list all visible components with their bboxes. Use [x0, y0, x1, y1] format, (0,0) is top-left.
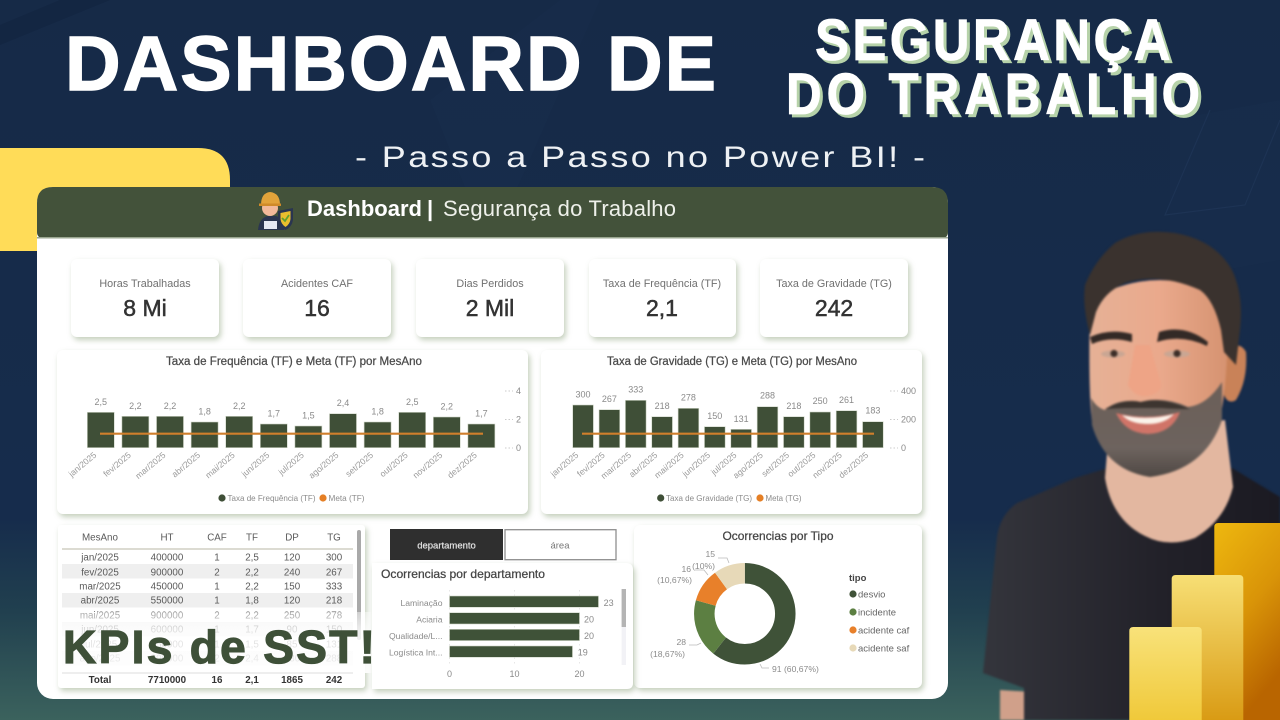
target line — [100, 433, 483, 435]
table rows: 2,5 — [245, 552, 259, 564]
table total row: Total — [89, 675, 112, 686]
table rows: 1,5 — [245, 640, 259, 650]
value labels: 1,7 — [475, 408, 488, 418]
month axis: mai/2025 — [652, 450, 686, 480]
department labels: Qualidade/L... — [389, 631, 442, 641]
table rows: 2 — [214, 568, 220, 578]
table header: TF — [246, 532, 258, 544]
dashboard header — [37, 187, 948, 238]
table scrollbar — [357, 530, 361, 640]
value labels: 218 — [786, 401, 801, 411]
value axis — [505, 386, 521, 453]
table total row — [60, 672, 360, 686]
icon: safety worker — [258, 192, 293, 230]
header title: | — [427, 196, 433, 221]
table rows: 800000 — [151, 654, 184, 664]
title: segurança do trabalho — [786, 8, 1200, 127]
table total row: 7710000 — [148, 675, 187, 686]
table rows: 1 — [214, 582, 220, 592]
table rows: 120 — [284, 596, 301, 606]
value axis: 0 — [901, 443, 906, 453]
month axis: dez/2025 — [445, 450, 479, 480]
value labels: 218 — [655, 401, 670, 411]
eyes — [1101, 350, 1190, 358]
month axis: dez/2025 — [837, 450, 870, 480]
table header: TG — [327, 532, 341, 544]
table header — [62, 532, 353, 550]
month axis: jun/2025 — [680, 450, 712, 479]
target line — [582, 433, 874, 435]
teeth — [1122, 414, 1174, 424]
subtitle: - Passo a Passo no Power BI! - — [355, 141, 925, 174]
department values — [578, 598, 614, 658]
chart title: Taxa de Gravidade (TG) e Meta (TG) por MesAno — [607, 356, 857, 368]
department labels: Logística Int... — [389, 648, 442, 658]
value labels: 1,5 — [302, 410, 315, 420]
table rows: 333 — [326, 582, 343, 592]
department labels: Laminação — [400, 598, 443, 608]
table rows: 120 — [284, 552, 301, 564]
table rows: 2,2 — [245, 568, 259, 578]
face — [1089, 280, 1229, 477]
table rows: 250 — [284, 610, 301, 622]
value axis: 200 — [901, 414, 916, 424]
month axis: abr/2025 — [627, 450, 660, 479]
table rows: mar/2025 — [79, 582, 121, 592]
donut title: Ocorrencias por Tipo — [722, 529, 834, 543]
table rows: 2,4 — [245, 654, 259, 664]
month axis: out/2025 — [785, 450, 818, 479]
month axis: mar/2025 — [599, 450, 633, 481]
callout: kpis de sst: KPIs de SST! — [63, 621, 375, 673]
table rows: 150 — [326, 624, 343, 636]
panel: kpi horas trabalhadas: 8 Mi — [123, 295, 167, 321]
value labels: 267 — [602, 394, 617, 404]
table rows: jun/2025 — [80, 624, 119, 636]
legend: Taxa de Gravidade (TG) — [666, 493, 752, 503]
donut legend: acidente caf — [858, 626, 910, 636]
nose — [1128, 345, 1161, 396]
presenter portrait — [983, 232, 1280, 720]
panel: kpi dias perdidos: 2 Mil — [466, 295, 514, 321]
value labels: 2,5 — [95, 397, 107, 407]
table rows: 267 — [326, 568, 342, 578]
table header: MesAno — [82, 532, 119, 544]
department labels — [389, 598, 443, 658]
department axis: 10 — [509, 669, 520, 679]
table rows: 1 — [214, 624, 220, 636]
table rows: 278 — [326, 610, 343, 622]
moustache — [1105, 400, 1190, 409]
value labels: 278 — [681, 392, 696, 402]
panel: kpi taxa de frequencia: 2,1 — [646, 295, 678, 321]
button: departamento: departamento — [417, 540, 476, 552]
table header: HT — [160, 532, 174, 544]
month axis: mar/2025 — [133, 450, 168, 481]
table rows: 2 — [214, 610, 220, 622]
value labels: 2,4 — [337, 398, 349, 408]
department axis — [447, 669, 585, 679]
value labels: 1,7 — [268, 408, 280, 418]
department axis: 0 — [447, 669, 452, 679]
table rows: 400000 — [151, 552, 184, 564]
value labels: 333 — [628, 384, 643, 394]
panel: kpi taxa de frequencia — [589, 259, 736, 337]
panel: donut chart — [634, 525, 922, 688]
panel: kpi taxa de gravidade: Taxa de Gravidade (TG) — [776, 278, 892, 290]
value labels: 2,2 — [233, 401, 245, 411]
table rows: jul/2025 — [82, 640, 118, 650]
table rows: 1 — [214, 552, 220, 564]
ear — [1224, 345, 1246, 402]
donut data labels: (10%) — [692, 561, 715, 571]
value axis — [890, 386, 916, 453]
month axis: set/2025 — [759, 450, 791, 479]
value axis: 2 — [516, 414, 521, 424]
header title: Segurança do Trabalho — [443, 196, 676, 221]
legend — [218, 493, 365, 503]
donut data labels — [650, 549, 819, 674]
month axis — [66, 450, 479, 481]
value labels — [575, 384, 880, 424]
panel: department bar chart — [372, 563, 633, 689]
table rows: mai/2025 — [80, 610, 121, 622]
table rows: 2,2 — [245, 610, 259, 622]
legend: Meta (TG) — [766, 493, 802, 503]
button: area — [505, 530, 616, 560]
value labels: 250 — [813, 396, 828, 406]
donut data labels: 91 (60,67%) — [772, 664, 819, 674]
table header: CAF — [207, 532, 227, 544]
hair — [1084, 232, 1241, 365]
department bars — [450, 596, 598, 657]
department values: 20 — [584, 614, 594, 624]
donut legend: acidente saf — [858, 644, 910, 654]
panel: kpi taxa de frequencia: Taxa de Frequência (TF) — [603, 278, 721, 290]
donut legend: desvio — [858, 590, 885, 600]
month axis: fev/2025 — [575, 450, 607, 479]
value labels: 261 — [839, 395, 854, 405]
panel: kpi taxa de gravidade — [760, 259, 908, 337]
donut data labels: 16 — [681, 564, 691, 574]
panel: severity chart — [541, 350, 922, 514]
arm — [1000, 690, 1036, 720]
legend: Meta (TF) — [328, 493, 365, 503]
table total row: 2,1 — [245, 675, 259, 686]
month axis: set/2025 — [343, 450, 375, 479]
department labels: Aciaria — [416, 614, 443, 624]
panel: kpi horas trabalhadas — [71, 259, 219, 337]
donut legend: incidente — [858, 608, 896, 618]
panel: kpi acidentes caf: Acidentes CAF — [281, 278, 353, 290]
button: area: área — [550, 540, 570, 552]
table rows: 900000 — [151, 568, 184, 578]
value labels: 2,2 — [164, 401, 176, 411]
panel: kpi acidentes caf: 16 — [304, 295, 330, 321]
month axis: nov/2025 — [411, 450, 444, 480]
donut legend: tipo — [849, 573, 867, 584]
month axis: jun/2025 — [239, 450, 271, 479]
bar chart title: Ocorrencias por departamento — [381, 567, 545, 581]
department values: 23 — [604, 598, 614, 608]
button: departamento — [390, 529, 503, 560]
donut data labels: 15 — [705, 549, 715, 559]
table rows: 1,8 — [245, 596, 259, 606]
title: dashboard de: DASHBOARD DE — [65, 21, 716, 107]
donut data labels: (18,67%) — [650, 649, 685, 659]
month axis: abr/2025 — [170, 450, 202, 479]
table rows: 1 — [214, 596, 220, 606]
mouth — [1116, 412, 1180, 434]
donut data labels: 28 — [676, 637, 686, 647]
value labels: 150 — [707, 411, 722, 421]
value labels: 2,2 — [441, 402, 453, 412]
table header: DP — [285, 532, 299, 544]
month axis: jan/2025 — [66, 450, 98, 479]
month axis: jul/2025 — [708, 450, 739, 478]
table rows: 600000 — [151, 624, 184, 636]
grid lines — [450, 590, 580, 666]
table rows: 1 — [214, 640, 220, 650]
month axis: ago/2025 — [307, 450, 341, 481]
month axis: nov/2025 — [810, 450, 844, 480]
table rows: jan/2025 — [80, 552, 119, 564]
kpi banner fade — [60, 612, 378, 673]
table rows: 2 — [214, 654, 220, 664]
table rows: 450000 — [151, 582, 184, 592]
panel: monthly table — [58, 525, 378, 688]
legend — [657, 493, 802, 503]
bars — [87, 412, 495, 448]
table rows: abr/2025 — [81, 596, 120, 606]
panel: kpi acidentes caf — [243, 259, 391, 337]
table rows: 650000 — [151, 640, 184, 650]
logo: power bi — [1129, 523, 1280, 720]
month axis: jul/2025 — [276, 450, 306, 478]
donut data labels: (10,67%) — [657, 575, 692, 585]
panel: kpi horas trabalhadas: Horas Trabalhadas — [99, 278, 191, 290]
value labels: 300 — [575, 390, 591, 400]
value axis: 0 — [516, 443, 521, 453]
month axis: out/2025 — [378, 450, 410, 479]
header title — [307, 196, 676, 221]
bars — [573, 400, 883, 448]
value labels: 1,8 — [198, 406, 211, 416]
bar chart scrollbar — [622, 589, 626, 665]
panel: kpi dias perdidos — [416, 259, 564, 337]
table rows: 300 — [326, 552, 343, 564]
value labels: 2,2 — [129, 401, 142, 411]
table rows: 90 — [287, 624, 298, 636]
value labels — [95, 397, 488, 420]
month axis — [548, 450, 870, 481]
yellow accent block — [0, 148, 230, 251]
table stripes — [62, 564, 353, 666]
table rows: 150 — [284, 582, 301, 592]
legend: Taxa de Frequência (TF) — [228, 493, 316, 503]
panel: dashboard — [37, 187, 948, 699]
panel: kpi taxa de gravidade: 242 — [815, 295, 853, 321]
month axis: ago/2025 — [731, 450, 765, 481]
table rows: 85 — [287, 640, 298, 650]
title: segurança do trabalho: SEGURANÇA — [815, 8, 1171, 73]
value labels: 288 — [760, 390, 775, 400]
eyebrows — [1090, 330, 1208, 346]
month axis: fev/2025 — [101, 450, 133, 479]
table total row: 16 — [212, 675, 223, 686]
table rows: 288 — [326, 654, 343, 664]
table rows: 230 — [284, 654, 301, 664]
chart title: Taxa de Frequência (TF) e Meta (TF) por MesAno — [166, 356, 422, 368]
table rows: 2,2 — [245, 582, 259, 592]
month axis: jan/2025 — [548, 450, 580, 479]
table rows: 131 — [326, 640, 342, 650]
table rows: 1,7 — [245, 624, 259, 636]
table rows: ago/2025 — [80, 654, 121, 664]
department values: 20 — [584, 631, 594, 641]
value labels: 2,5 — [406, 397, 418, 407]
table total row: 242 — [326, 675, 343, 686]
table rows: fev/2025 — [81, 568, 119, 578]
table rows — [79, 552, 343, 664]
beard — [1091, 382, 1222, 477]
table total row: 1865 — [281, 675, 303, 686]
month axis: mai/2025 — [203, 450, 237, 480]
table rows: 900000 — [151, 610, 184, 622]
value labels: 1,8 — [371, 406, 384, 416]
value labels: 183 — [865, 406, 880, 416]
table rows: 550000 — [151, 596, 184, 606]
header title: Dashboard — [307, 196, 422, 221]
neck — [1105, 420, 1233, 543]
donut legend — [849, 573, 910, 654]
title: segurança do trabalho: DO TRABALHO — [786, 62, 1200, 127]
panel: frequency chart — [57, 350, 528, 514]
value axis: 400 — [901, 386, 916, 396]
department axis: 20 — [574, 669, 585, 679]
panel: kpi dias perdidos: Dias Perdidos — [456, 278, 524, 290]
department values: 19 — [578, 648, 588, 658]
value axis: 4 — [516, 386, 521, 396]
donut — [704, 573, 785, 654]
value labels: 131 — [734, 414, 749, 424]
table rows: 218 — [326, 596, 343, 606]
table rows: 240 — [284, 568, 301, 578]
shirt — [983, 468, 1280, 720]
